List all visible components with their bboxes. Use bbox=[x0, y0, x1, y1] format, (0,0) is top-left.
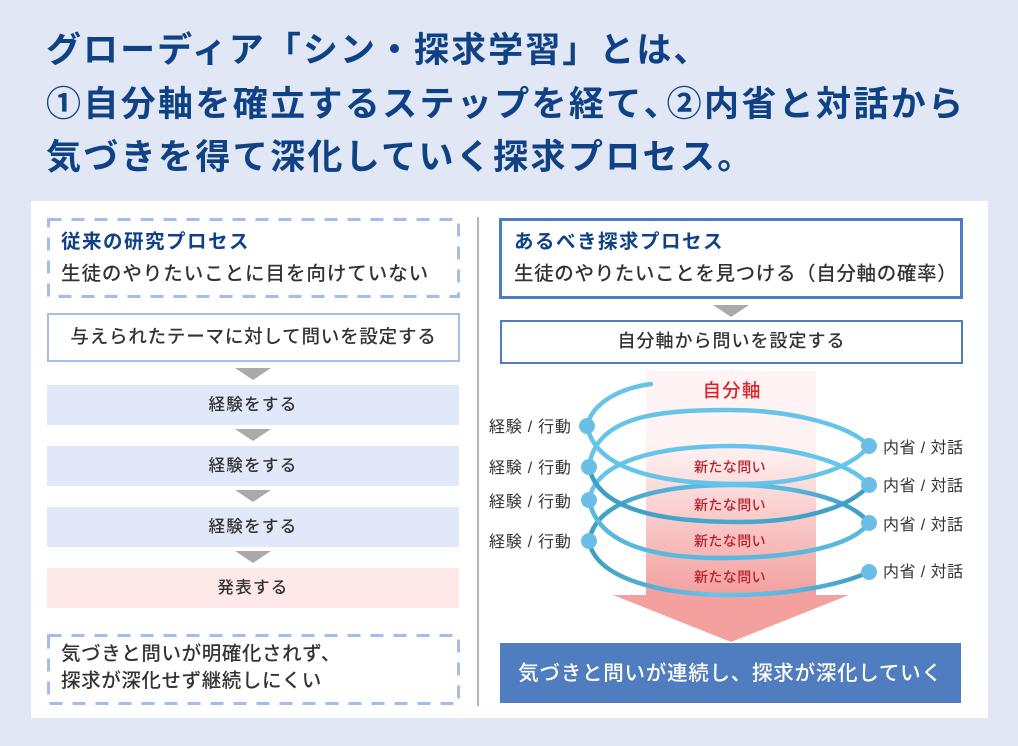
title bbox=[46, 31, 965, 177]
own-axis column bbox=[613, 371, 849, 642]
step: experience 2: 経験をする bbox=[208, 457, 298, 475]
experience / action labels: 経験 / 行動 bbox=[489, 418, 572, 436]
new question labels bbox=[694, 459, 766, 585]
experience / action labels: 経験 / 行動 bbox=[489, 459, 572, 477]
step: given theme bbox=[47, 313, 460, 362]
arrow bbox=[235, 551, 271, 563]
callout: ideal process heading: あるべき探求プロセス bbox=[514, 231, 724, 253]
title: 気づきを得て深化していく探求プロセス。 bbox=[46, 138, 755, 177]
step: experience 3: 経験をする bbox=[208, 518, 298, 536]
arrow bbox=[235, 490, 271, 502]
conclusion banner bbox=[500, 643, 961, 703]
new question labels: 新たな問い bbox=[694, 533, 766, 549]
experience / action labels bbox=[489, 418, 572, 551]
callout: ideal process heading bbox=[499, 218, 963, 299]
new question labels: 新たな問い bbox=[694, 497, 766, 513]
step: experience 1: 経験をする bbox=[208, 396, 298, 414]
connection dots bbox=[579, 418, 877, 580]
callout: conventional process result: 気づきと問いが明確化されず、 bbox=[61, 643, 341, 665]
step: given theme: 与えられたテーマに対して問いを設定する bbox=[70, 326, 437, 346]
callout: conventional process result: 探求が深化せず継続しにくい bbox=[61, 670, 322, 692]
arrow bbox=[235, 429, 271, 441]
experience / action labels: 経験 / 行動 bbox=[489, 493, 572, 511]
callout: ideal process heading: 生徒のやりたいことを見つける（自分軸の確率） bbox=[514, 263, 957, 285]
reflection / dialogue labels: 内省 / 対話 bbox=[883, 439, 964, 457]
arrow bbox=[235, 368, 271, 380]
step: presentation: 発表する bbox=[217, 579, 289, 597]
reflection / dialogue labels: 内省 / 対話 bbox=[883, 516, 964, 534]
step: experience 1 bbox=[47, 385, 459, 425]
reflection / dialogue labels: 内省 / 対話 bbox=[883, 563, 964, 581]
title: ①自分軸を確立するステップを経て、②内省と対話から bbox=[46, 85, 965, 124]
experience / action labels: 経験 / 行動 bbox=[489, 533, 572, 551]
panel: ideal inquiry process bbox=[499, 218, 963, 703]
callout: conventional process result bbox=[47, 634, 460, 705]
step: set question from own axis bbox=[500, 320, 963, 364]
step: experience 3 bbox=[47, 507, 459, 547]
spiral lines bbox=[587, 384, 869, 595]
callout: conventional process heading bbox=[47, 218, 460, 298]
panel: main white panel bbox=[31, 201, 988, 718]
step: presentation bbox=[47, 568, 459, 608]
title: グローディア「シン・探求学習」とは、 bbox=[46, 31, 710, 70]
arrow bbox=[713, 305, 749, 317]
own-axis label: 自分軸 bbox=[702, 380, 762, 401]
new question labels: 新たな問い bbox=[694, 569, 766, 585]
panel: conventional research process bbox=[47, 218, 460, 705]
callout: conventional process heading: 従来の研究プロセス bbox=[61, 231, 250, 253]
reflection / dialogue labels bbox=[883, 439, 964, 581]
new question labels: 新たな問い bbox=[694, 459, 766, 475]
step: experience 2 bbox=[47, 446, 459, 486]
callout: conventional process heading: 生徒のやりたいことに目を向けていない bbox=[61, 263, 429, 285]
conclusion banner: 気づきと問いが連続し、探求が深化していく bbox=[518, 662, 943, 685]
step: set question from own axis: 自分軸から問いを設定する bbox=[618, 331, 846, 351]
reflection / dialogue labels: 内省 / 対話 bbox=[883, 477, 964, 495]
